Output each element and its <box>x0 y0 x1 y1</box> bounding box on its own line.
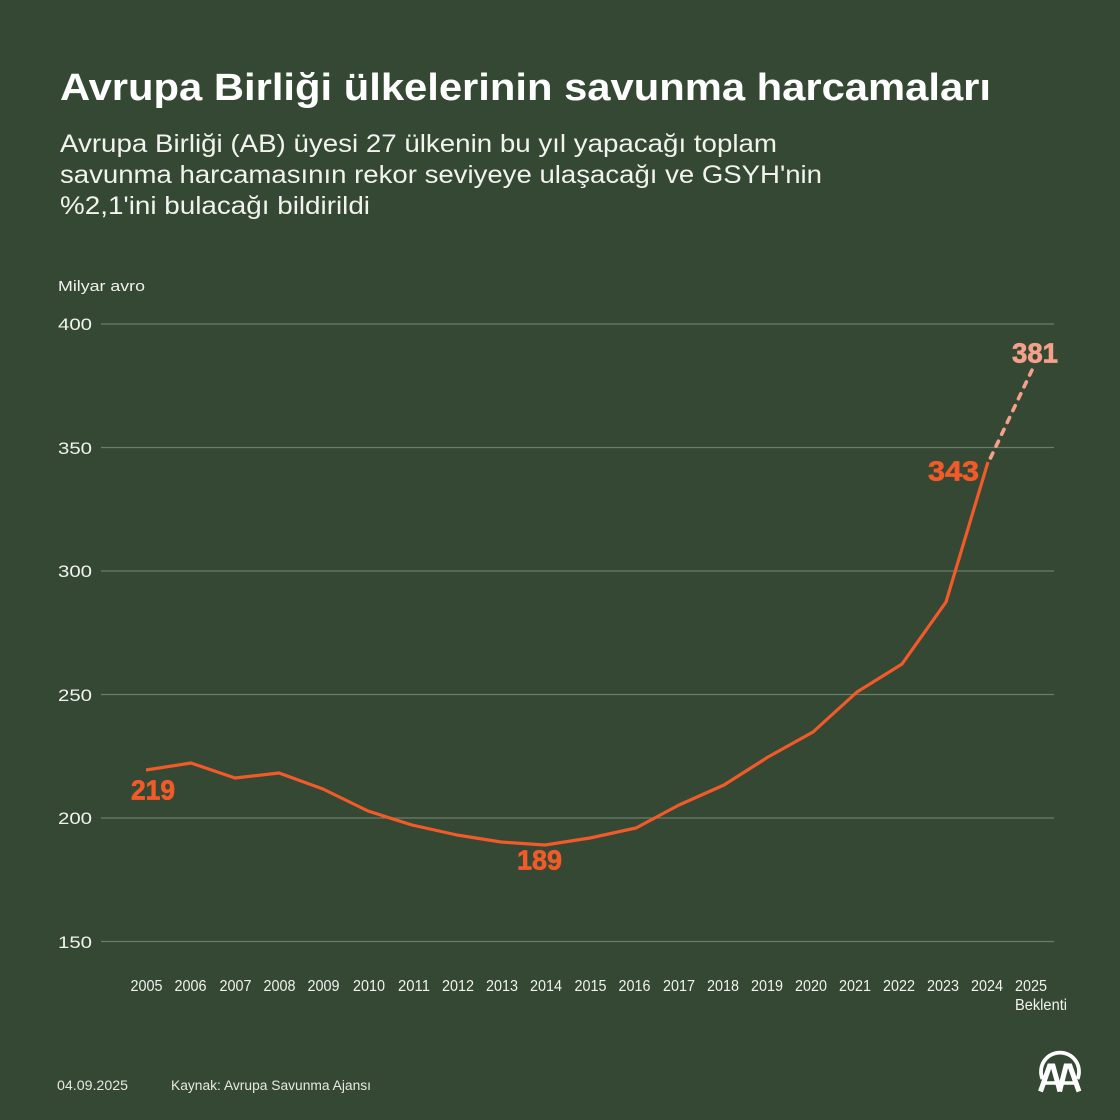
title: Avrupa Birliği ülkelerinin savunma harcamaları <box>60 67 991 109</box>
value label 381: 381 <box>1012 338 1058 368</box>
projected dashed line <box>990 370 1032 458</box>
x axis labels: 2010 <box>353 978 385 995</box>
y axis labels: 300 <box>58 563 92 581</box>
x axis labels <box>130 978 1067 1014</box>
x axis labels: 2023 <box>927 978 959 995</box>
y axis labels: 350 <box>58 440 92 458</box>
subtitle <box>60 130 822 220</box>
x axis labels: 2022 <box>883 978 915 995</box>
chart: line chart of defence spending <box>58 316 1067 1014</box>
y axis labels: 250 <box>58 687 92 705</box>
x axis labels: 2017 <box>663 978 695 995</box>
y axis labels: 200 <box>58 810 92 828</box>
data line <box>146 462 988 845</box>
x axis labels: 2014 <box>530 978 562 995</box>
x axis labels: 2016 <box>618 978 651 995</box>
x axis labels: 2011 <box>398 978 430 995</box>
date: 04.09.2025 <box>57 1078 128 1093</box>
x axis labels: 2006 <box>174 978 207 995</box>
x axis labels: 2018 <box>707 978 739 995</box>
x axis labels: 2025 <box>1015 978 1047 995</box>
subtitle: savunma harcamasının rekor seviyeye ulaşacağı ve GSYH'nin <box>60 161 822 189</box>
x axis labels: 2019 <box>751 978 783 995</box>
x axis labels: 2013 <box>486 978 518 995</box>
x axis labels: 2009 <box>308 978 340 995</box>
x axis labels: Beklenti <box>1015 997 1067 1014</box>
x axis labels: 2015 <box>574 978 607 995</box>
x axis labels: 2020 <box>795 978 827 995</box>
x axis labels: 2024 <box>971 978 1003 995</box>
source: Kaynak: Avrupa Savunma Ajansı <box>171 1078 371 1093</box>
x axis labels: 2021 <box>839 978 871 995</box>
y axis labels: 150 <box>58 934 92 952</box>
icon: AA logo <box>1040 1053 1079 1092</box>
subtitle: %2,1'ini bulacağı bildirildi <box>60 192 370 220</box>
y axis labels: 400 <box>58 316 92 334</box>
value label 343: 343 <box>928 456 979 486</box>
value label 219: 219 <box>131 774 175 806</box>
x axis labels: 2008 <box>264 978 296 995</box>
subtitle: Avrupa Birliği (AB) üyesi 27 ülkenin bu yıl yapacağı toplam <box>60 130 777 158</box>
y axis labels <box>58 316 92 952</box>
x axis labels: 2005 <box>130 978 163 995</box>
value label 189: 189 <box>517 844 562 876</box>
x axis labels: 2007 <box>220 978 252 995</box>
y axis unit label: Milyar avro <box>58 278 145 295</box>
x axis labels: 2012 <box>442 978 474 995</box>
